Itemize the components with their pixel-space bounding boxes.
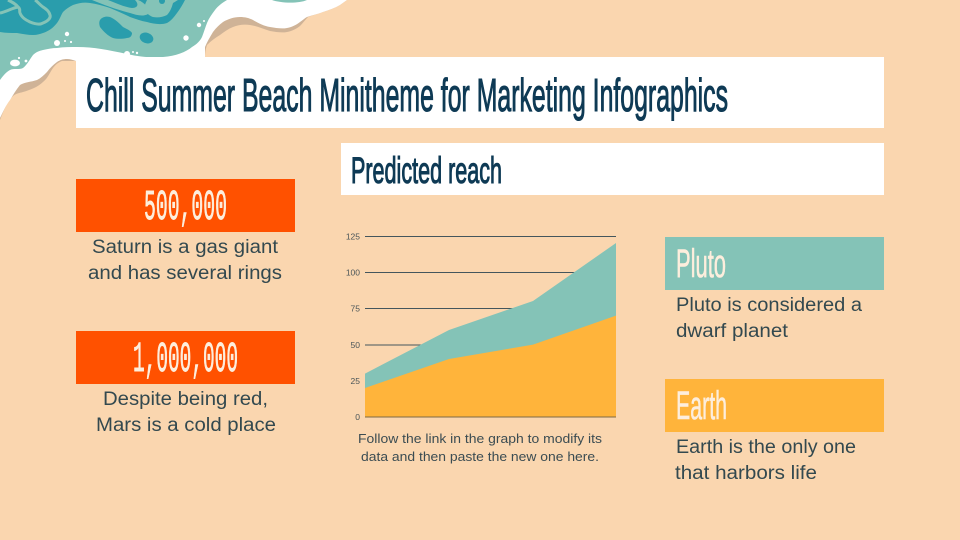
- area chart: predicted reach: [346, 232, 616, 422]
- area chart: predicted reach: 0: [355, 412, 360, 422]
- area chart: predicted reach: 75: [351, 304, 360, 314]
- panel: Earth: [665, 379, 884, 484]
- panel: 1,000,000 Mars: Mars is a cold place: [96, 415, 276, 436]
- decoration: ocean wave with foam: [0, 0, 347, 120]
- area chart: predicted reach: 25: [351, 376, 360, 386]
- area chart: predicted reach: 100: [346, 268, 360, 278]
- panel: Pluto: [665, 237, 884, 342]
- panel: Earth: Earth: [676, 384, 727, 428]
- panel: 1,000,000 Mars: 1,000,000: [133, 335, 238, 384]
- panel: 1,000,000 Mars: Despite being red,: [103, 389, 268, 410]
- panel: Pluto: Pluto: [676, 242, 726, 286]
- panel: Pluto: Pluto is considered a: [676, 295, 862, 316]
- panel: Earth: that harbors life: [675, 463, 817, 484]
- panel: 500,000 Saturn: and has several rings: [88, 263, 282, 284]
- panel: Earth: Earth is the only one: [676, 437, 856, 458]
- chart caption: Follow the link in the graph to modify its: [358, 432, 602, 446]
- area chart: predicted reach: 50: [351, 340, 360, 350]
- panel: 500,000 Saturn: Saturn is a gas giant: [92, 237, 279, 258]
- area chart: predicted reach: 125: [346, 232, 360, 242]
- panel: 500,000 Saturn: 500,000: [144, 183, 227, 232]
- heading: predicted reach: Predicted reach: [351, 150, 502, 191]
- panel: Pluto: dwarf planet: [676, 321, 789, 342]
- title: [76, 57, 884, 128]
- heading: predicted reach: [341, 143, 884, 195]
- panel: 500,000 Saturn: [76, 179, 295, 284]
- chart caption: [358, 432, 602, 464]
- panel: 1,000,000 Mars: [76, 331, 295, 436]
- chart caption: data and then paste the new one here.: [361, 450, 599, 464]
